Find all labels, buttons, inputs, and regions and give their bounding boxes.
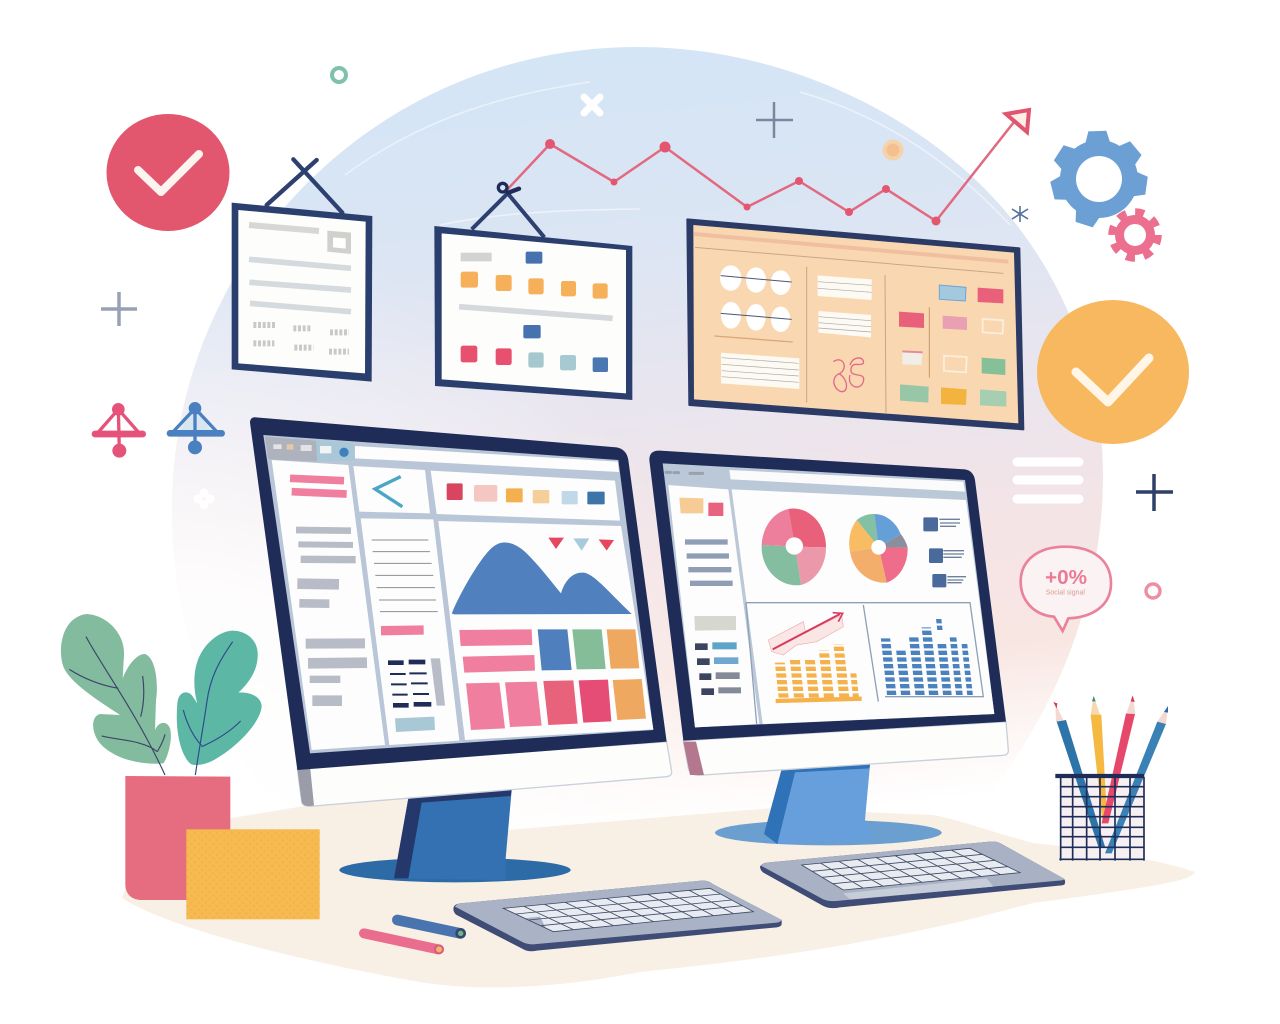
text column	[361, 518, 459, 745]
pencil blue left	[1053, 702, 1105, 847]
orange bar chart	[776, 644, 862, 701]
icon: white menu lines	[1017, 462, 1079, 499]
browser tabs	[265, 437, 619, 472]
icon: orange check badge	[1037, 300, 1189, 444]
icon: dark plus right	[1136, 474, 1173, 511]
monitor: left	[250, 417, 672, 806]
pie chart right	[849, 514, 908, 583]
pencil yellow	[1091, 696, 1107, 823]
background blob	[172, 47, 1103, 975]
chevron tile	[353, 466, 430, 513]
leaf right	[177, 631, 262, 775]
desk surface	[122, 795, 1195, 987]
icon: red check badge	[106, 114, 230, 231]
sidebar	[272, 460, 385, 750]
pens on desk	[364, 920, 466, 954]
icon: asterisk	[1012, 206, 1028, 222]
sketched red arrow	[768, 613, 843, 655]
panel: hanging document card	[232, 159, 372, 382]
panel: peach dashboard board	[687, 219, 1023, 429]
icon: grey plus left	[101, 292, 137, 326]
panel: hanging tiles card	[434, 183, 632, 400]
pencil blue right	[1105, 706, 1168, 853]
icon: white clover	[194, 488, 214, 510]
stand: right monitor	[715, 764, 942, 845]
icon: blue network	[170, 402, 222, 454]
keyboard: left	[453, 881, 782, 951]
callout: speech bubble: Social signal	[1046, 590, 1085, 597]
stand: left monitor	[339, 790, 571, 882]
icon: sun dot	[882, 140, 904, 160]
icon: white cross	[584, 97, 600, 113]
keyboard: right	[760, 842, 1065, 908]
callout: speech bubble	[1021, 547, 1111, 631]
chart dividers	[746, 603, 983, 724]
callout: speech bubble: +0%	[1045, 566, 1087, 589]
colour block grid	[459, 629, 646, 730]
icon: blue gear	[1049, 131, 1148, 229]
browser address bar	[666, 470, 965, 492]
icon: pink gear	[1112, 212, 1158, 258]
pie chart left	[762, 509, 826, 585]
plant in red pot	[61, 614, 320, 919]
toolbar icons	[431, 471, 620, 521]
blue bar chart	[883, 618, 970, 695]
monitor: right	[649, 451, 1008, 775]
pot	[125, 776, 230, 900]
icon: green ring	[332, 68, 346, 82]
leaf left	[61, 614, 171, 775]
icon: pink ring	[1146, 584, 1160, 598]
line chart with arrow	[505, 110, 1029, 226]
pencil holder	[1053, 695, 1168, 861]
wire basket	[1055, 776, 1145, 861]
icon: grey plus top	[756, 102, 793, 138]
pencil red	[1102, 695, 1135, 823]
area chart	[452, 538, 632, 614]
yellow card	[186, 829, 320, 919]
sidebar	[668, 485, 759, 727]
pie legend	[923, 517, 966, 587]
icon: red network	[95, 403, 143, 458]
